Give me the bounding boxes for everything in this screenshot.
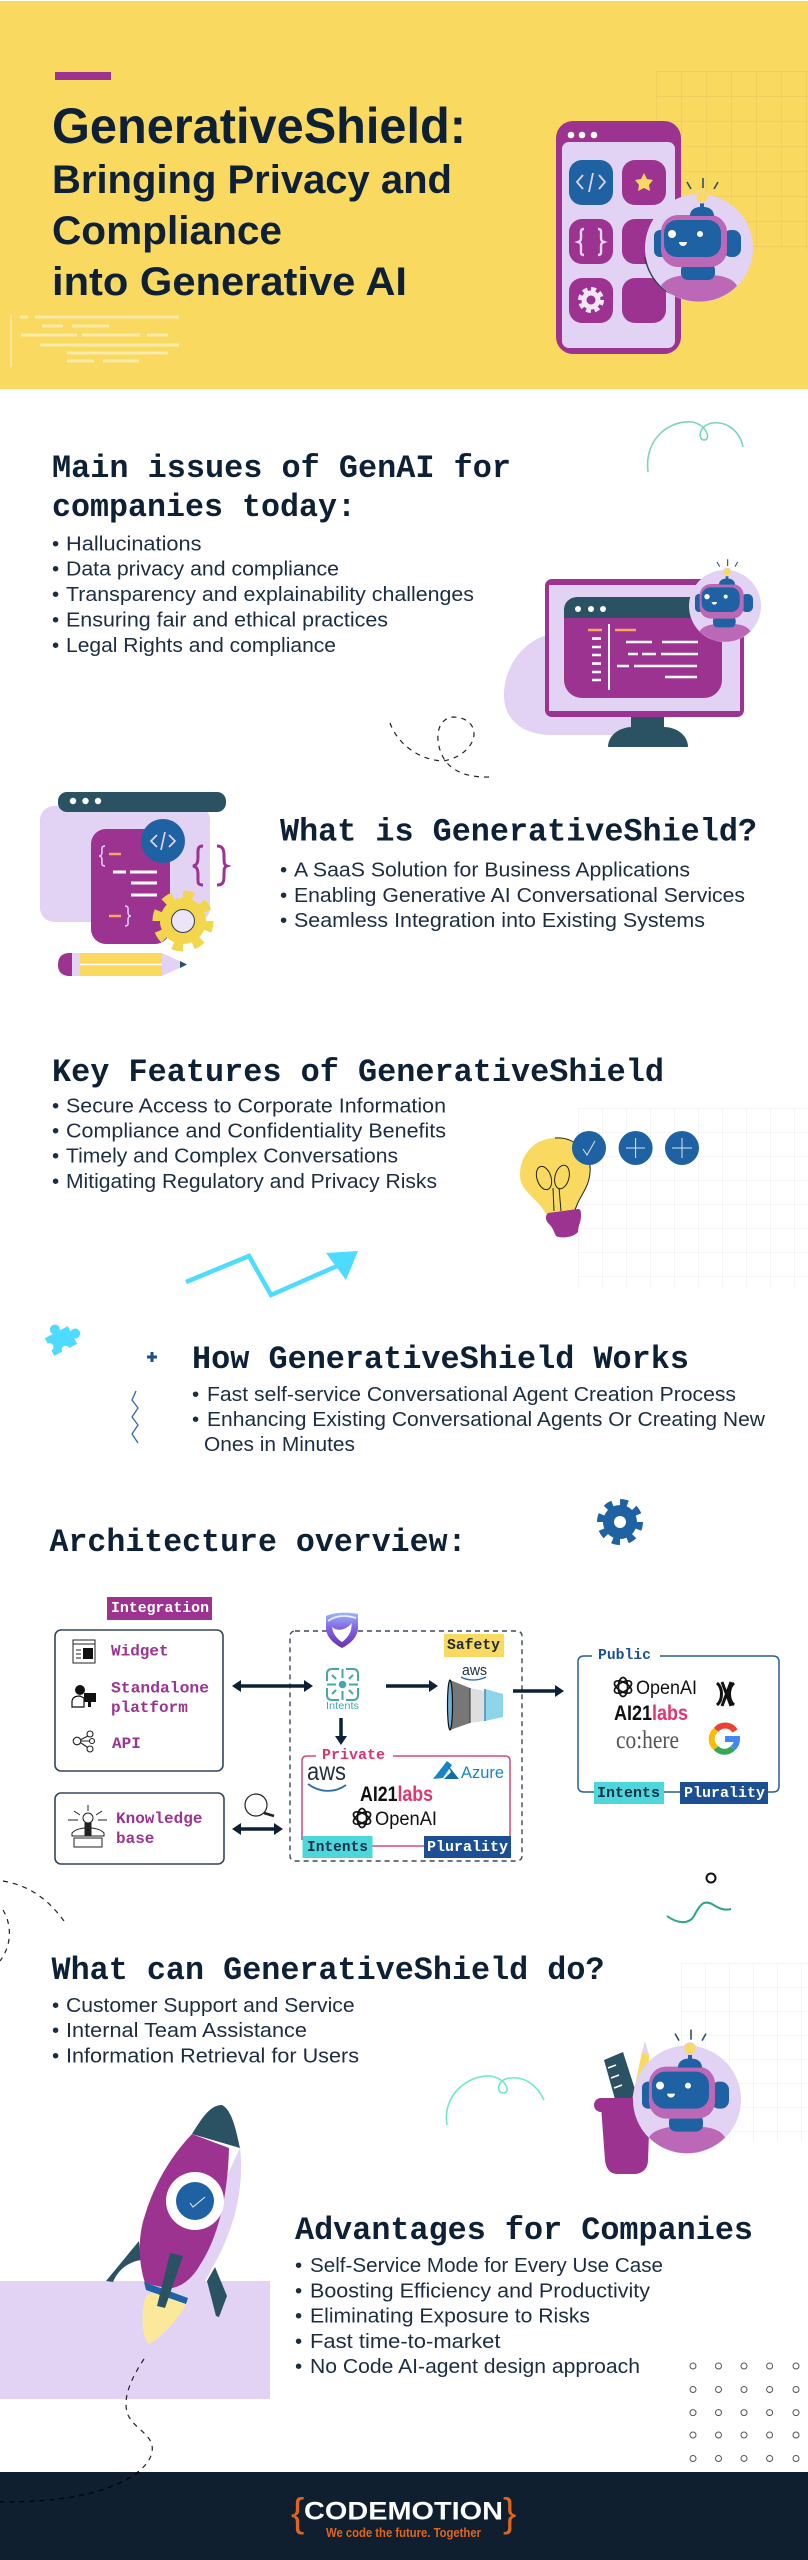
box: knowledge base: Knowledge (116, 1810, 202, 1828)
arrow: intents to safety (386, 1680, 438, 1692)
panel: what can it do (52, 1952, 808, 2174)
bullet list: Seamless Integration into Existing Systems (294, 909, 705, 932)
title: GenerativeShield: (52, 98, 466, 154)
label: integration (107, 1597, 212, 1620)
label: plurality: Plurality (684, 1785, 765, 1802)
box: integration options: API (112, 1735, 141, 1753)
heading: companies today: (52, 489, 356, 526)
bullet list: • (295, 2330, 302, 2353)
logo: codemotion: } (503, 2491, 516, 2535)
bullet list: No Code AI-agent design approach (310, 2355, 640, 2378)
label: intents (594, 1782, 664, 1804)
box: integration options: platform (111, 1699, 188, 1717)
bullet list: • (52, 2019, 59, 2042)
box: private providers (302, 1747, 511, 1858)
icon: light bulb with check and plus badges (520, 1131, 699, 1237)
bullet list: Eliminating Exposure to Risks (310, 2305, 590, 2328)
bullet list: Enabling Generative AI Conversational Services (294, 884, 745, 907)
icon: blue gear (600, 1502, 640, 1542)
bullet list: Ensuring fair and ethical practices (66, 608, 388, 631)
bullet list: • (192, 1383, 199, 1406)
arrow: zig-zag cyan (186, 1251, 358, 1295)
bullet list: Mitigating Regulatory and Privacy Risks (66, 1170, 437, 1193)
bullet list (52, 1094, 446, 1193)
bullet list: Legal Rights and compliance (66, 634, 336, 657)
arrow: safety to public (513, 1685, 564, 1697)
logo: AI21labs: AI21labs (614, 1702, 688, 1725)
heading (52, 450, 511, 526)
icon: monitor with robot (504, 559, 761, 747)
box: knowledge base (55, 1793, 224, 1864)
bullet list: Fast self-service Conversational Agent Creation Process (207, 1383, 736, 1406)
icon: GenerativeShield logo (326, 1613, 358, 1648)
bullet list: • (52, 1170, 59, 1193)
bullet list: Boosting Efficiency and Productivity (310, 2279, 651, 2302)
logo: codemotion: { (291, 2491, 304, 2535)
icon: plus (147, 1352, 157, 1362)
logo: Google G (712, 1725, 737, 1752)
bullet list: Fast time-to-market (310, 2330, 501, 2353)
label: plurality: Plurality (427, 1839, 508, 1856)
arrow: knowledge base to private (232, 1823, 283, 1835)
bullet list: • (52, 608, 59, 631)
bullet list: • (52, 558, 59, 581)
icon: person at screen (72, 1685, 96, 1707)
icon: magnifier (245, 1794, 274, 1816)
bullet list (280, 858, 745, 932)
bullet list: Transparency and explainability challenges (66, 583, 474, 606)
panel: advantages (0, 2105, 799, 2502)
bullet list: • (52, 583, 59, 606)
bullet list: • (295, 2279, 302, 2302)
logo: codemotion (291, 2491, 516, 2535)
bullet list: • (52, 1119, 59, 1142)
bullet list: Compliance and Confidentiality Benefits (66, 1119, 446, 1142)
box: public providers (578, 1647, 779, 1804)
decorative dashed arcs (0, 1881, 64, 1961)
icon: intents (326, 1669, 359, 1712)
bullet list: Customer Support and Service (66, 1994, 355, 2017)
box: public providers: Public (598, 1647, 651, 1664)
panel: main issues (52, 422, 761, 777)
icon: pencil cup with robot (594, 2030, 741, 2174)
logo: AI21labs: AI21labs (360, 1783, 433, 1806)
bullet list: • (295, 2254, 302, 2277)
logo: OpenAI: OpenAI (375, 1809, 437, 1830)
arrow: integration to intents (232, 1680, 313, 1692)
decorative dashed curl (390, 717, 490, 777)
bullet list: • (52, 1994, 59, 2017)
heading: What can GenerativeShield do? (52, 1952, 604, 1989)
box: knowledge base: base (116, 1830, 154, 1848)
logo: OpenAI: OpenAI (636, 1678, 697, 1699)
panel: key features (52, 1054, 808, 1295)
title (52, 98, 466, 304)
bullet list: Hallucinations (66, 532, 202, 555)
box: private providers: Private (322, 1747, 385, 1764)
bullet list: • (52, 1094, 59, 1117)
decorative squiggle (132, 1391, 138, 1443)
heading: What is GenerativeShield? (280, 814, 757, 851)
box: integration options (55, 1630, 223, 1771)
heading: How GenerativeShield Works (192, 1341, 689, 1378)
bullet list: Internal Team Assistance (66, 2019, 307, 2042)
bullet list: • (280, 858, 287, 881)
logo: OpenAI (612, 1678, 697, 1699)
logo: cohere: co:here (616, 1727, 679, 1754)
box: integration options: Widget (111, 1643, 169, 1661)
bullet list: • (52, 634, 59, 657)
icon: phone with app tiles (556, 121, 681, 354)
label: safety: Safety (447, 1637, 500, 1654)
icon: bulb on books (68, 1805, 107, 1847)
icon: code window with gear and pencil (40, 792, 227, 976)
bullet list: Information Retrieval for Users (66, 2044, 359, 2068)
decorative small circle (706, 1874, 716, 1882)
logo: Azure: Azure (461, 1763, 504, 1782)
logo: aws small: aws (462, 1662, 487, 1679)
label: intents: Intents (597, 1785, 660, 1802)
icon: safety funnel (448, 1680, 503, 1730)
bullet list (52, 1994, 359, 2068)
label: safety (444, 1634, 504, 1657)
heading: Advantages for Companies (295, 2212, 753, 2249)
bullet list: Timely and Complex Conversations (66, 1145, 398, 1168)
decorative dashed trail (0, 2359, 152, 2502)
decorative code lines (11, 315, 179, 367)
label: intents (302, 1836, 372, 1858)
bullet list: • (52, 532, 59, 555)
icon: share nodes (73, 1731, 94, 1752)
bullet list: Secure Access to Corporate Information (66, 1094, 446, 1117)
bullet list: • (280, 909, 287, 932)
icon: intents: Intents (326, 1700, 359, 1712)
bullet list (192, 1383, 765, 1456)
bullet list (295, 2254, 663, 2378)
logo: black mark (717, 1682, 734, 1706)
panel: architecture overview (50, 1502, 779, 1864)
icon: rocket (106, 2105, 241, 2344)
dashed GenerativeShield box (290, 1631, 522, 1861)
bullet list: • (295, 2355, 302, 2378)
decorative teal loop (446, 2076, 544, 2125)
decorative green squiggle (667, 1902, 731, 1922)
label: intents: Intents (307, 1839, 368, 1856)
title: into Generative AI (52, 260, 407, 304)
bullet list: Self-Service Mode for Every Use Case (310, 2254, 663, 2277)
lavender block (0, 2281, 270, 2399)
tagline: We code the future. Together (326, 2525, 481, 2540)
accent bar (55, 72, 111, 80)
heading: Key Features of GenerativeShield (52, 1054, 664, 1091)
bullet list: • (52, 2044, 59, 2068)
heading: Architecture overview: (50, 1524, 466, 1561)
bullet list (52, 532, 474, 657)
logo: Azure (433, 1761, 504, 1782)
bullet list: • (52, 1145, 59, 1168)
title: Bringing Privacy and (52, 158, 452, 202)
panel: hero header (0, 1, 808, 389)
icon: robot (645, 178, 753, 302)
logo: aws: aws (307, 1758, 346, 1786)
bullet list: A SaaS Solution for Business Applications (294, 858, 690, 881)
bullet list: Ones in Minutes (204, 1433, 355, 1456)
panel: how it works (38, 1315, 765, 1456)
bullet list: Enhancing Existing Conversational Agents Or Creating New (207, 1408, 765, 1431)
logo: OpenAI (351, 1808, 437, 1830)
bullet list: Data privacy and compliance (66, 558, 339, 581)
title: Compliance (52, 209, 282, 253)
panel: footer (0, 2472, 808, 2560)
decorative dot grid (690, 2363, 799, 2462)
logo: codemotion: CODEMOTION (304, 2498, 503, 2526)
bullet list: • (192, 1408, 199, 1431)
decorative green loop (648, 422, 743, 472)
arrow: intents to private (335, 1718, 347, 1745)
box: integration options: Standalone (111, 1680, 209, 1698)
heading: Main issues of GenAI for (52, 450, 511, 487)
icon: widget window (73, 1640, 95, 1663)
bullet list: • (295, 2305, 302, 2328)
label: integration: Integration (111, 1600, 209, 1617)
icon: puzzle piece (38, 1315, 86, 1361)
panel: what is GenerativeShield (40, 792, 757, 976)
bullet list: • (280, 884, 287, 907)
